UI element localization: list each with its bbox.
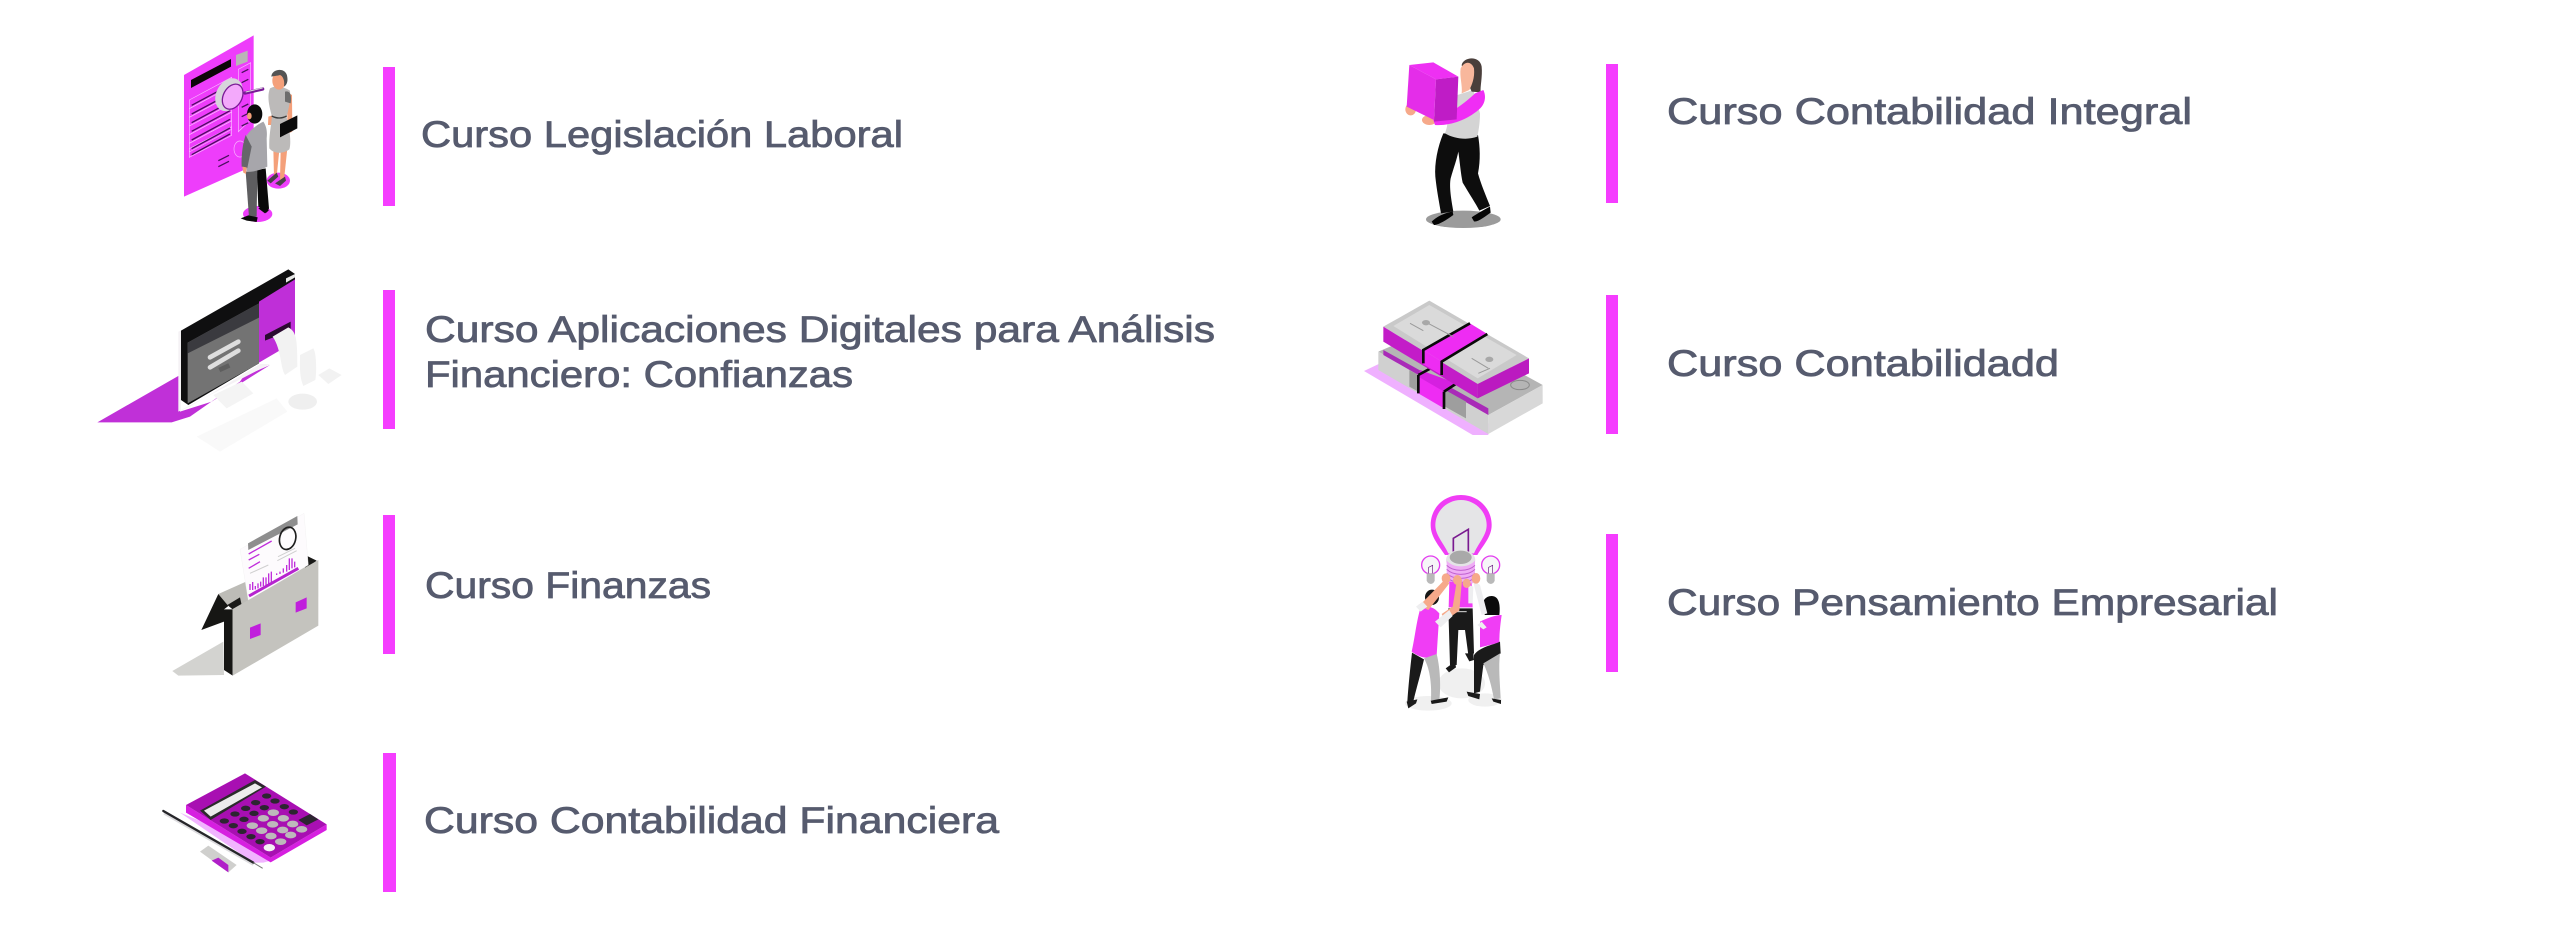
left person bbox=[1407, 573, 1462, 708]
course title: Curso Legislación Laboral bbox=[421, 114, 903, 155]
back of case bbox=[218, 555, 317, 607]
monitor bbox=[178, 269, 295, 412]
keys bbox=[247, 809, 307, 851]
calculator body bbox=[186, 773, 327, 862]
accent bar bbox=[1606, 534, 1618, 672]
accent bar bbox=[383, 67, 395, 206]
ground shadow bbox=[1426, 211, 1501, 228]
case front bbox=[233, 560, 318, 676]
flap and spine bbox=[201, 594, 228, 630]
magnifier bbox=[210, 73, 263, 116]
accent bar bbox=[383, 753, 396, 892]
ground shadows bbox=[1405, 668, 1502, 711]
icon: desktop computer bbox=[97, 269, 342, 452]
icon: stacks of banknotes bbox=[1364, 301, 1543, 435]
course title: Curso Contabilidadd bbox=[1667, 343, 2059, 384]
accent bar bbox=[383, 290, 395, 429]
lower stack bbox=[1378, 327, 1543, 434]
panel: Curso Contabilidad Financiera bbox=[163, 753, 999, 892]
icon: woman carrying a box bbox=[1405, 58, 1501, 228]
course title: Curso Contabilidad Integral bbox=[1667, 91, 2192, 132]
centre person bbox=[1446, 582, 1474, 672]
panel: Curso Pensamiento Empresarial bbox=[1405, 495, 2278, 711]
icon: people lifting a light bulb bbox=[1405, 495, 1502, 711]
hands bbox=[1405, 103, 1416, 115]
icon: calculator with pencil and eraser bbox=[163, 773, 327, 872]
icon: briefcase with report bbox=[172, 513, 318, 676]
head and hair bbox=[1462, 58, 1482, 92]
panel: Curso Contabilidadd bbox=[1364, 295, 2059, 435]
panel: Curso Aplicaciones Digitales bbox=[97, 269, 1215, 452]
purple floor shadow bbox=[97, 365, 270, 422]
sleeve bbox=[1433, 90, 1485, 125]
accent bar bbox=[1606, 295, 1618, 434]
course title: Curso Contabilidad Financiera bbox=[424, 800, 999, 841]
box bbox=[1407, 62, 1458, 122]
clasps bbox=[250, 623, 261, 639]
floor bbox=[1364, 363, 1488, 435]
small bulb right bbox=[1482, 556, 1500, 584]
small bulb left bbox=[1422, 556, 1440, 584]
man bbox=[241, 104, 272, 222]
pencil bbox=[163, 811, 263, 868]
course title bbox=[425, 309, 1215, 395]
right person bbox=[1463, 573, 1502, 704]
report sheet bbox=[240, 513, 308, 601]
course title: Curso Pensamiento Empresarial bbox=[1667, 582, 2278, 623]
upper stack bbox=[1383, 301, 1529, 398]
shadow bbox=[172, 642, 224, 676]
course title: Financiero: Confianzas bbox=[425, 354, 853, 395]
torso bbox=[1445, 90, 1480, 139]
course title: Curso Aplicaciones Digitales para Análisis bbox=[425, 309, 1215, 350]
panel: Curso Finanzas bbox=[172, 513, 711, 676]
accent bar bbox=[1606, 64, 1618, 203]
panel: Curso Legislación Laboral bbox=[184, 35, 903, 222]
icon: document with two people and magnifier bbox=[184, 35, 297, 222]
paper roll bbox=[273, 327, 342, 386]
woman bbox=[267, 70, 297, 189]
panel: Curso Contabilidad Integral bbox=[1405, 58, 2192, 228]
pale base bbox=[180, 813, 271, 863]
course title: Curso Finanzas bbox=[425, 565, 711, 606]
document sheet bbox=[184, 35, 254, 197]
main bulb bbox=[1431, 495, 1492, 586]
accent bar bbox=[383, 515, 395, 654]
eraser bbox=[200, 846, 237, 872]
legs bbox=[1435, 133, 1490, 213]
stand, keyboard, mouse bbox=[213, 382, 253, 408]
